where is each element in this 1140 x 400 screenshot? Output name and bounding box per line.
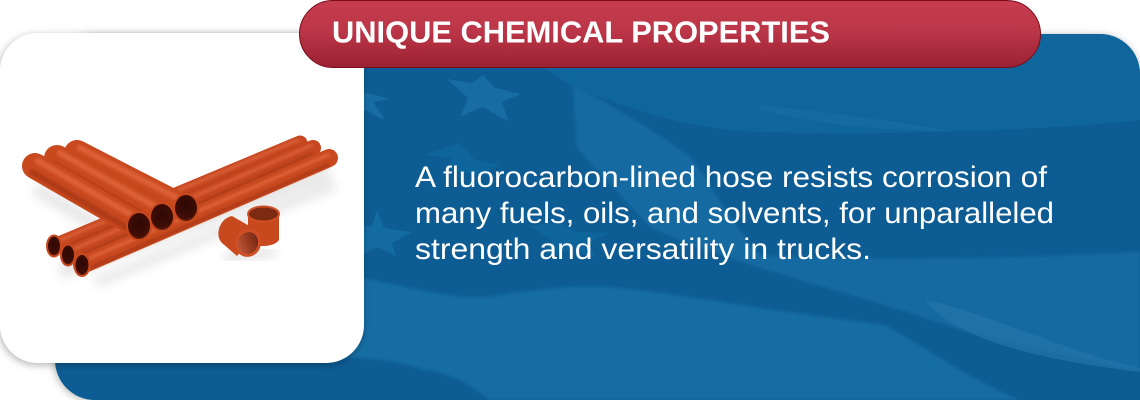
heading: red title pill	[300, 0, 1040, 68]
title: UNIQUE CHEMICAL PROPERTIES	[332, 14, 830, 50]
icon: flag star left	[364, 92, 390, 120]
hose: short ring back	[248, 206, 279, 246]
icon: flag star lower middle	[530, 222, 610, 258]
body text: strength and versatility in trucks.	[415, 233, 871, 266]
hose: large right	[74, 148, 198, 222]
product photo: orange hoses	[32, 140, 335, 283]
body text: A fluorocarbon-lined hose resists corrosion of	[415, 161, 1048, 194]
body text: many fuels, oils, and solvents, for unparalleled	[415, 197, 1054, 230]
hose: short ring front	[218, 216, 263, 259]
icon: flag star top	[447, 75, 521, 121]
hose: long back	[47, 140, 300, 256]
panel: white product card	[0, 33, 364, 363]
body text	[415, 161, 1054, 266]
hose: long front	[74, 155, 329, 276]
hose: long middle	[61, 145, 313, 266]
hose: large middle	[54, 153, 174, 231]
icon: flag star middle	[425, 143, 500, 175]
hose: large front	[32, 161, 151, 240]
icon: flag star lower left	[364, 210, 412, 256]
